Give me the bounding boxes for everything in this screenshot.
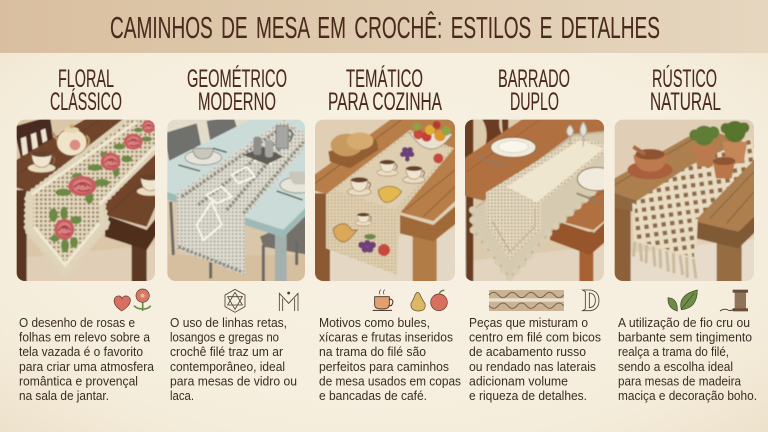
description text <box>170 315 297 403</box>
description text: na trama do filé são <box>319 344 426 359</box>
heading: temático para cozinha <box>328 64 442 116</box>
description text <box>618 315 757 403</box>
heading: geométrico moderno: MODERNO <box>198 88 276 116</box>
description text: perfeitos para caminhos <box>319 359 449 374</box>
icons: lace band and letter D <box>489 290 599 311</box>
heading: floral clássico: CLÁSSICO <box>50 87 122 116</box>
description text: romântica e provençal <box>19 374 138 388</box>
illustration: rustic natural runner <box>611 116 757 284</box>
description text: para mesas de madeira <box>618 374 742 388</box>
description text: e bancadas de café. <box>319 388 427 403</box>
heading: floral clássico <box>50 65 122 116</box>
heading: barrado duplo <box>498 65 570 116</box>
icons: cup, pear, apple <box>373 290 447 311</box>
heading: barrado duplo: DUPLO <box>510 88 559 116</box>
illustration: geometric runner on glass table <box>167 120 305 281</box>
description text: na sala de jantar. <box>19 388 109 403</box>
heading: rústico natural: NATURAL <box>650 88 721 116</box>
heading: temático para cozinha: TEMÁTICO <box>346 64 423 93</box>
description text: losangos e gregas no <box>170 330 279 344</box>
illustration: double border runner <box>465 120 604 281</box>
icons: leaf and thread spool <box>668 290 748 311</box>
description text: e riqueza de detalhes. <box>469 388 587 403</box>
panel: floral clássico <box>13 65 165 403</box>
heading: barrado duplo: BARRADO <box>498 65 570 93</box>
panel: barrado duplo <box>465 69 604 402</box>
description text: O uso de linhas retas, <box>170 315 287 330</box>
panel: geométrico moderno <box>167 65 305 400</box>
description text: folhas em relevo sobre a <box>19 330 151 344</box>
heading: geométrico moderno <box>187 64 287 116</box>
description text: para mesas de vidro ou <box>170 374 297 388</box>
description text: O desenho de rosas e <box>19 315 135 330</box>
heading: rústico natural: RÚSTICO <box>652 64 717 93</box>
illustration: floral runner on dark wood table <box>16 120 155 281</box>
description text: xícaras e frutas inseridos <box>319 330 453 344</box>
description text: sendo a escolha ideal <box>618 359 733 374</box>
description text: A utilização de fio cru ou <box>618 315 750 330</box>
description text <box>319 315 461 403</box>
description text: adicionam volume <box>469 374 568 388</box>
description text <box>469 315 601 403</box>
heading: temático para cozinha: PARA COZINHA <box>328 88 442 116</box>
description text: crochê filé traz um ar <box>170 344 284 359</box>
description text: ou rendado nas laterais <box>469 359 596 374</box>
heading: rústico natural <box>650 64 721 116</box>
heading: geométrico moderno: GEOMÉTRICO <box>187 64 287 93</box>
description text: tela vazada é o favorito <box>19 344 143 359</box>
description text: de acabamento russo <box>469 344 586 359</box>
description text: contemporâneo, ideal <box>170 359 285 374</box>
illustration: kitchen themed runner <box>312 116 458 284</box>
icons: heart and flower <box>114 289 151 311</box>
description text: de mesa usados em copas <box>319 374 461 388</box>
icons: hexagon knot and monogram <box>225 289 298 312</box>
description text: Peças que misturam o <box>469 315 588 330</box>
description text: Motivos como bules, <box>319 315 430 330</box>
description text: maciça e decoração boho. <box>618 388 757 403</box>
description text <box>19 315 155 403</box>
description text: para criar uma atmosfera <box>19 359 155 374</box>
description text: barbante sem tingimento <box>618 330 752 344</box>
panel: temático para cozinha <box>312 64 461 403</box>
description text: laca. <box>170 388 194 403</box>
panel: rústico natural <box>611 64 757 403</box>
heading: floral clássico: FLORAL <box>58 65 114 93</box>
description text: centro em filé com bicos <box>469 330 601 344</box>
description text: realça a trama do filé, <box>618 344 729 359</box>
header band <box>0 0 768 53</box>
